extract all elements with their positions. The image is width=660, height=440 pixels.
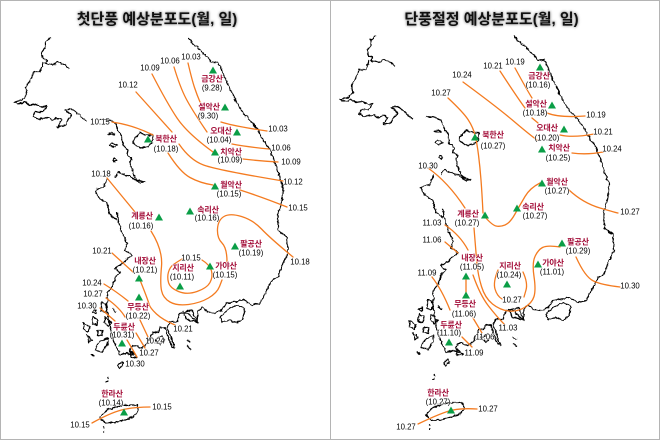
date labels: 10.18	[290, 258, 310, 266]
mountain markers and names: 월악산	[546, 176, 569, 186]
date labels: 10.27	[502, 296, 522, 304]
mountain markers and names: (11.06)	[452, 310, 476, 318]
mountain markers and names: (10.16)	[526, 80, 551, 90]
mountain markers and names: 설악산	[525, 98, 548, 108]
date labels: 10.21	[483, 62, 503, 70]
mountain markers and names: (10.31)	[110, 330, 135, 340]
mountain markers and names: (10.25)	[546, 154, 571, 162]
map outline	[14, 38, 288, 433]
date labels: 10.09	[140, 64, 160, 72]
mountain markers and names	[99, 66, 264, 416]
date labels: 10.12	[118, 80, 138, 90]
isolines	[92, 63, 293, 423]
isolines	[418, 68, 620, 424]
date labels: 10.27	[620, 208, 640, 216]
mountain markers and names: (10.21)	[133, 266, 158, 274]
date labels: 10.30	[418, 162, 438, 170]
mountain markers and names: 팔공산	[567, 236, 590, 246]
date labels: 10.15	[90, 118, 110, 126]
map outline	[340, 36, 614, 430]
mountain markers and names: (10.27)	[481, 142, 506, 150]
date labels: 10.30	[77, 302, 97, 310]
mountain markers and names: (9.28)	[202, 84, 223, 92]
mountain markers and names: (10.18)	[154, 144, 179, 154]
mountain markers and names: (10.27)	[426, 398, 451, 406]
mountain markers and names: 계룡산	[131, 210, 154, 220]
mountain markers and names: (10.22)	[126, 312, 151, 320]
mountain markers and names: 북한산	[155, 134, 178, 144]
title: peak autumn colors: 단풍절정 예상분포도(월, 일)	[404, 11, 579, 28]
date labels: 10.19	[505, 58, 525, 66]
mountain markers and names: 한라산	[101, 388, 124, 398]
mountain markers and names: (10.11)	[170, 272, 194, 282]
date labels: 10.21	[92, 246, 112, 256]
panel frame	[330, 0, 660, 440]
date labels	[70, 52, 310, 430]
date labels: 10.24	[452, 70, 472, 80]
mountain markers and names: (11.10)	[437, 328, 461, 338]
mountain markers and names: (10.18)	[523, 108, 548, 118]
date labels: 10.09	[281, 158, 301, 166]
date labels: 10.27	[139, 348, 159, 358]
mountain markers and names: (9.30)	[198, 112, 219, 120]
date labels: 10.27	[478, 404, 498, 414]
mountain markers and names: 내장산	[461, 252, 484, 262]
panel: first autumn colors map	[0, 0, 330, 440]
date labels: 10.30	[620, 282, 640, 290]
date labels: 11.03	[499, 324, 517, 332]
mountain markers and names: 속리산	[522, 202, 545, 212]
mountain markers and names: 한라산	[427, 388, 450, 398]
date labels: 10.27	[83, 290, 103, 298]
mountain markers and names: 지리산	[172, 262, 195, 272]
mountain markers and names: (11.05)	[460, 262, 484, 272]
date labels: 10.06	[160, 56, 180, 66]
date labels: 10.27	[396, 422, 416, 432]
mountain markers and names: 치악산	[220, 146, 243, 156]
date labels: 10.03	[181, 52, 201, 62]
date labels: 10.18	[91, 170, 111, 178]
mountain markers and names: (10.14)	[99, 398, 124, 408]
mountain markers and names: 금강산	[201, 74, 224, 84]
mountain markers and names: (10.29)	[566, 246, 591, 256]
date labels: 10.19	[586, 110, 606, 120]
mountain markers and names: (11.01)	[540, 268, 564, 276]
mountain markers and names: 무등산	[127, 302, 150, 312]
date labels: 10.06	[271, 144, 291, 152]
date labels: 10.12	[283, 178, 303, 186]
date labels: 10.24	[82, 278, 102, 288]
date labels: 10.24	[145, 336, 165, 346]
mountain markers and names: 내장산	[134, 256, 157, 266]
mountain markers and names: 무등산	[454, 298, 477, 308]
mountain markers and names: (10.27)	[545, 186, 570, 196]
mountain markers and names: 오대산	[210, 126, 233, 136]
mountain markers and names: (10.27)	[523, 212, 548, 220]
mountain markers and names: 지리산	[499, 260, 522, 270]
mountain markers and names: 가야산	[215, 260, 238, 270]
date labels: 10.15	[152, 402, 172, 412]
mountain markers and names: (10.09)	[218, 156, 243, 164]
mountain markers and names: 두륜산	[440, 320, 463, 330]
mountain markers and names: (10.16)	[195, 214, 220, 222]
date labels: 11.06	[423, 236, 441, 244]
mountain markers and names: (10.15)	[217, 190, 242, 198]
date labels: 10.15	[181, 254, 201, 262]
date labels: 11.03	[423, 218, 441, 228]
date labels: 11.06	[476, 332, 494, 342]
date labels: 10.24	[602, 144, 622, 154]
mountain markers and names: 월악산	[220, 180, 243, 190]
title: first autumn colors: 첫단풍 예상분포도(월, 일)	[77, 11, 237, 28]
mountain markers and names: 치악산	[548, 142, 571, 152]
date labels	[396, 58, 640, 432]
date labels: 10.27	[431, 88, 451, 98]
date labels: 10.21	[173, 324, 193, 334]
mountain markers and names: 설악산	[198, 102, 221, 112]
mountain markers and names: 오대산	[536, 122, 559, 132]
mountain markers and names: (10.24)	[497, 270, 522, 280]
mountain markers and names	[426, 64, 591, 414]
date labels: 11.09	[418, 268, 436, 278]
date labels: 10.15	[70, 420, 90, 430]
mountain markers and names: (10.27)	[455, 218, 480, 228]
mountain markers and names: (10.15)	[213, 270, 238, 280]
mountain markers and names: (10.19)	[239, 248, 264, 258]
mountain markers and names: (10.16)	[129, 222, 154, 230]
panel frame	[0, 0, 330, 440]
date labels: 10.21	[593, 128, 613, 136]
date labels: 10.30	[125, 360, 145, 368]
mountain markers and names: 북한산	[482, 130, 505, 140]
mountain markers and names: 속리산	[197, 204, 220, 214]
date labels: 10.03	[268, 124, 288, 134]
mountain markers and names: (10.04)	[207, 136, 232, 144]
date labels: 11.09	[465, 348, 483, 358]
mountain markers and names: 금강산	[528, 70, 551, 80]
mountain markers and names: 계룡산	[457, 208, 480, 218]
mountain markers and names: 팔공산	[240, 238, 263, 248]
mountain markers and names: (10.20)	[535, 134, 560, 142]
mountain markers and names: 두륜산	[113, 322, 136, 332]
mountain markers and names: 가야산	[542, 258, 565, 268]
panel: peak autumn colors map	[330, 0, 660, 440]
date labels: 10.15	[288, 204, 308, 212]
